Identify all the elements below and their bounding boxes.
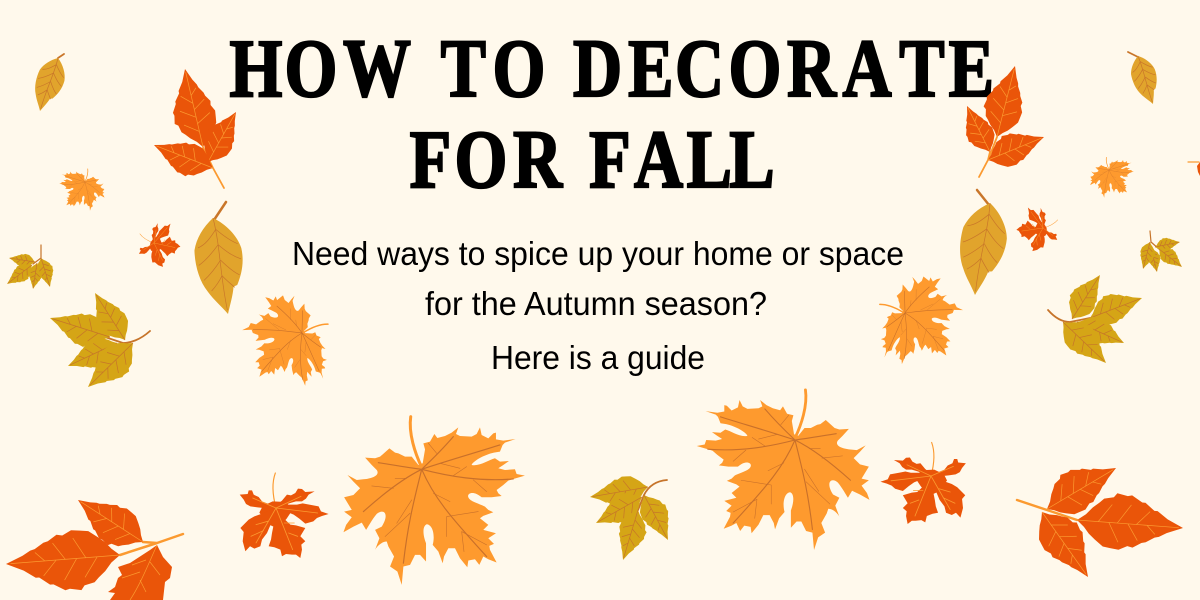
maple leaf: big orange left bbox=[343, 417, 525, 585]
leaf cluster: yellow bottom center bbox=[588, 472, 681, 564]
leaf cluster: yellow small right bbox=[1136, 231, 1187, 274]
intro text: Need ways to spice up your home or space bbox=[292, 235, 904, 272]
intro text bbox=[292, 235, 904, 376]
maple leaf: small orange right bbox=[1090, 157, 1134, 198]
leaf cluster: red bottom left bbox=[4, 484, 183, 600]
maple leaf: small orange left bbox=[59, 169, 105, 211]
leaf cluster: red top right bbox=[954, 61, 1050, 177]
title bbox=[230, 23, 994, 206]
title: FOR FALL bbox=[410, 114, 775, 206]
maple leaf: big orange right bbox=[697, 390, 869, 550]
leaf: gold large left bbox=[189, 202, 251, 318]
intro text: Here is a guide bbox=[491, 339, 705, 376]
maple leaf: small red right bbox=[1010, 198, 1066, 255]
intro text: for the Autumn season? bbox=[425, 285, 767, 322]
maple leaf: red bottom left bbox=[240, 473, 329, 558]
leaf: gold large right bbox=[952, 190, 1012, 299]
leaf: gold top right bbox=[1126, 52, 1165, 108]
maple leaf: red bottom right bbox=[880, 442, 966, 524]
leaf cluster: red bottom right bbox=[1017, 449, 1185, 588]
leaf: red clipped at right edge bbox=[1188, 162, 1200, 176]
maple leaf: medium orange right bbox=[873, 271, 967, 371]
title: HOW TO DECORATE bbox=[230, 23, 994, 115]
maple leaf: medium orange left bbox=[239, 290, 335, 392]
leaf: gold top left bbox=[27, 54, 71, 115]
leaf cluster: yellow small left bbox=[2, 245, 58, 291]
leaf cluster: yellow left bbox=[45, 286, 150, 400]
maple leaf: small red left bbox=[130, 213, 188, 271]
leaf cluster: yellow right bbox=[1048, 267, 1147, 374]
leaf cluster: red top left bbox=[148, 64, 248, 188]
